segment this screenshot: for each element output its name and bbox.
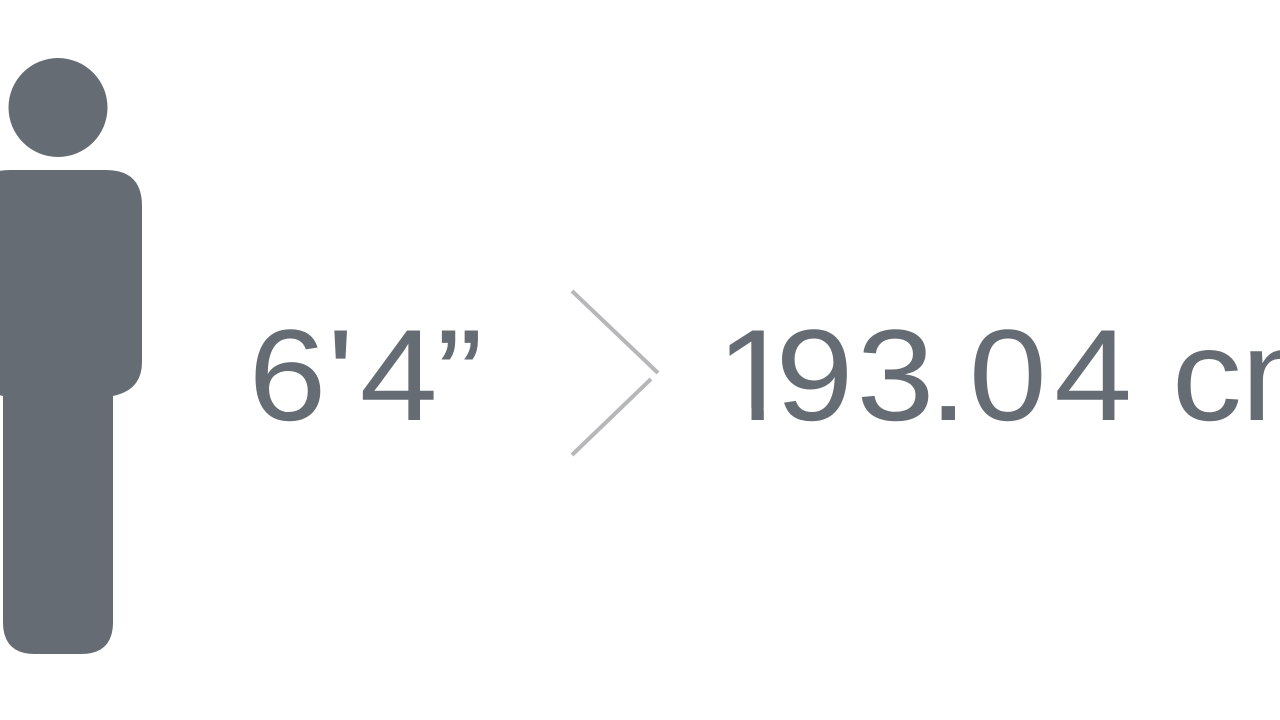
arrow: converts to	[572, 291, 658, 455]
height in centimetres: 1	[716, 303, 794, 448]
icon: standing person	[0, 58, 142, 654]
height in feet and inches: 6'4”	[248, 303, 483, 448]
height in centimetres	[730, 329, 1280, 422]
